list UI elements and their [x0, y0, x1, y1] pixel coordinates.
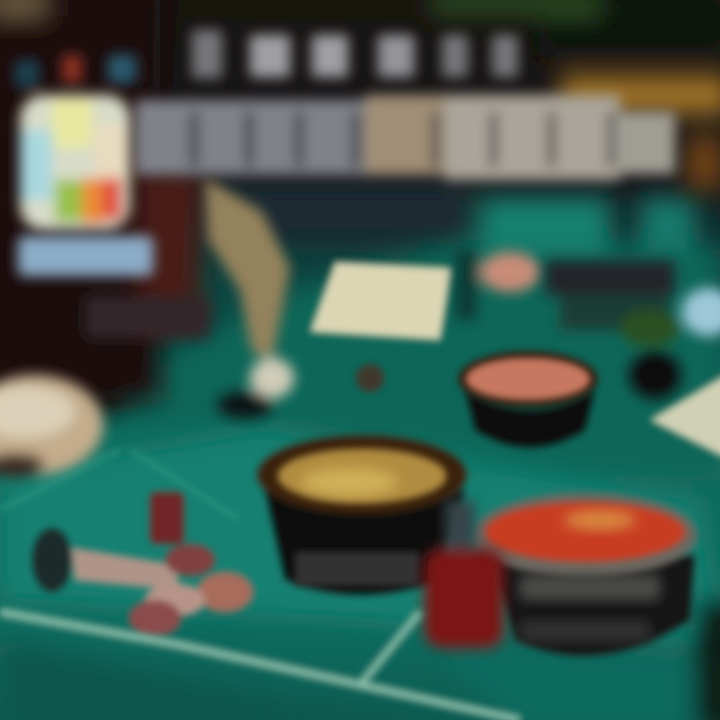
cream card far right: [650, 372, 720, 460]
faint diagonal felt lines: [0, 450, 240, 520]
dark items right: [545, 260, 720, 399]
bowl: salmon soup: [458, 351, 598, 448]
title: illegible blurred heading: [135, 30, 675, 180]
green table surface: [0, 185, 720, 720]
plate left edge: [0, 375, 103, 477]
standing tan figure: [205, 178, 294, 419]
table line markings: [0, 612, 520, 720]
pale blue base: [18, 236, 153, 276]
top dark room details: [0, 0, 720, 400]
title letter gaps: [190, 112, 615, 167]
rainbow swatch: [15, 55, 136, 230]
title lower row: [135, 95, 675, 180]
small chip centre: [356, 364, 384, 392]
title upper row: [192, 30, 518, 78]
bowl: golden soup: [257, 435, 467, 595]
bowl: red soup: [473, 493, 697, 656]
icon: rainbow colour panel: [15, 55, 153, 276]
poker chip stacks: [32, 492, 253, 636]
cream card on table: [310, 262, 452, 340]
red dice/jar: [424, 500, 504, 648]
dark grey label: [85, 296, 210, 338]
small pink accent: [455, 250, 540, 320]
